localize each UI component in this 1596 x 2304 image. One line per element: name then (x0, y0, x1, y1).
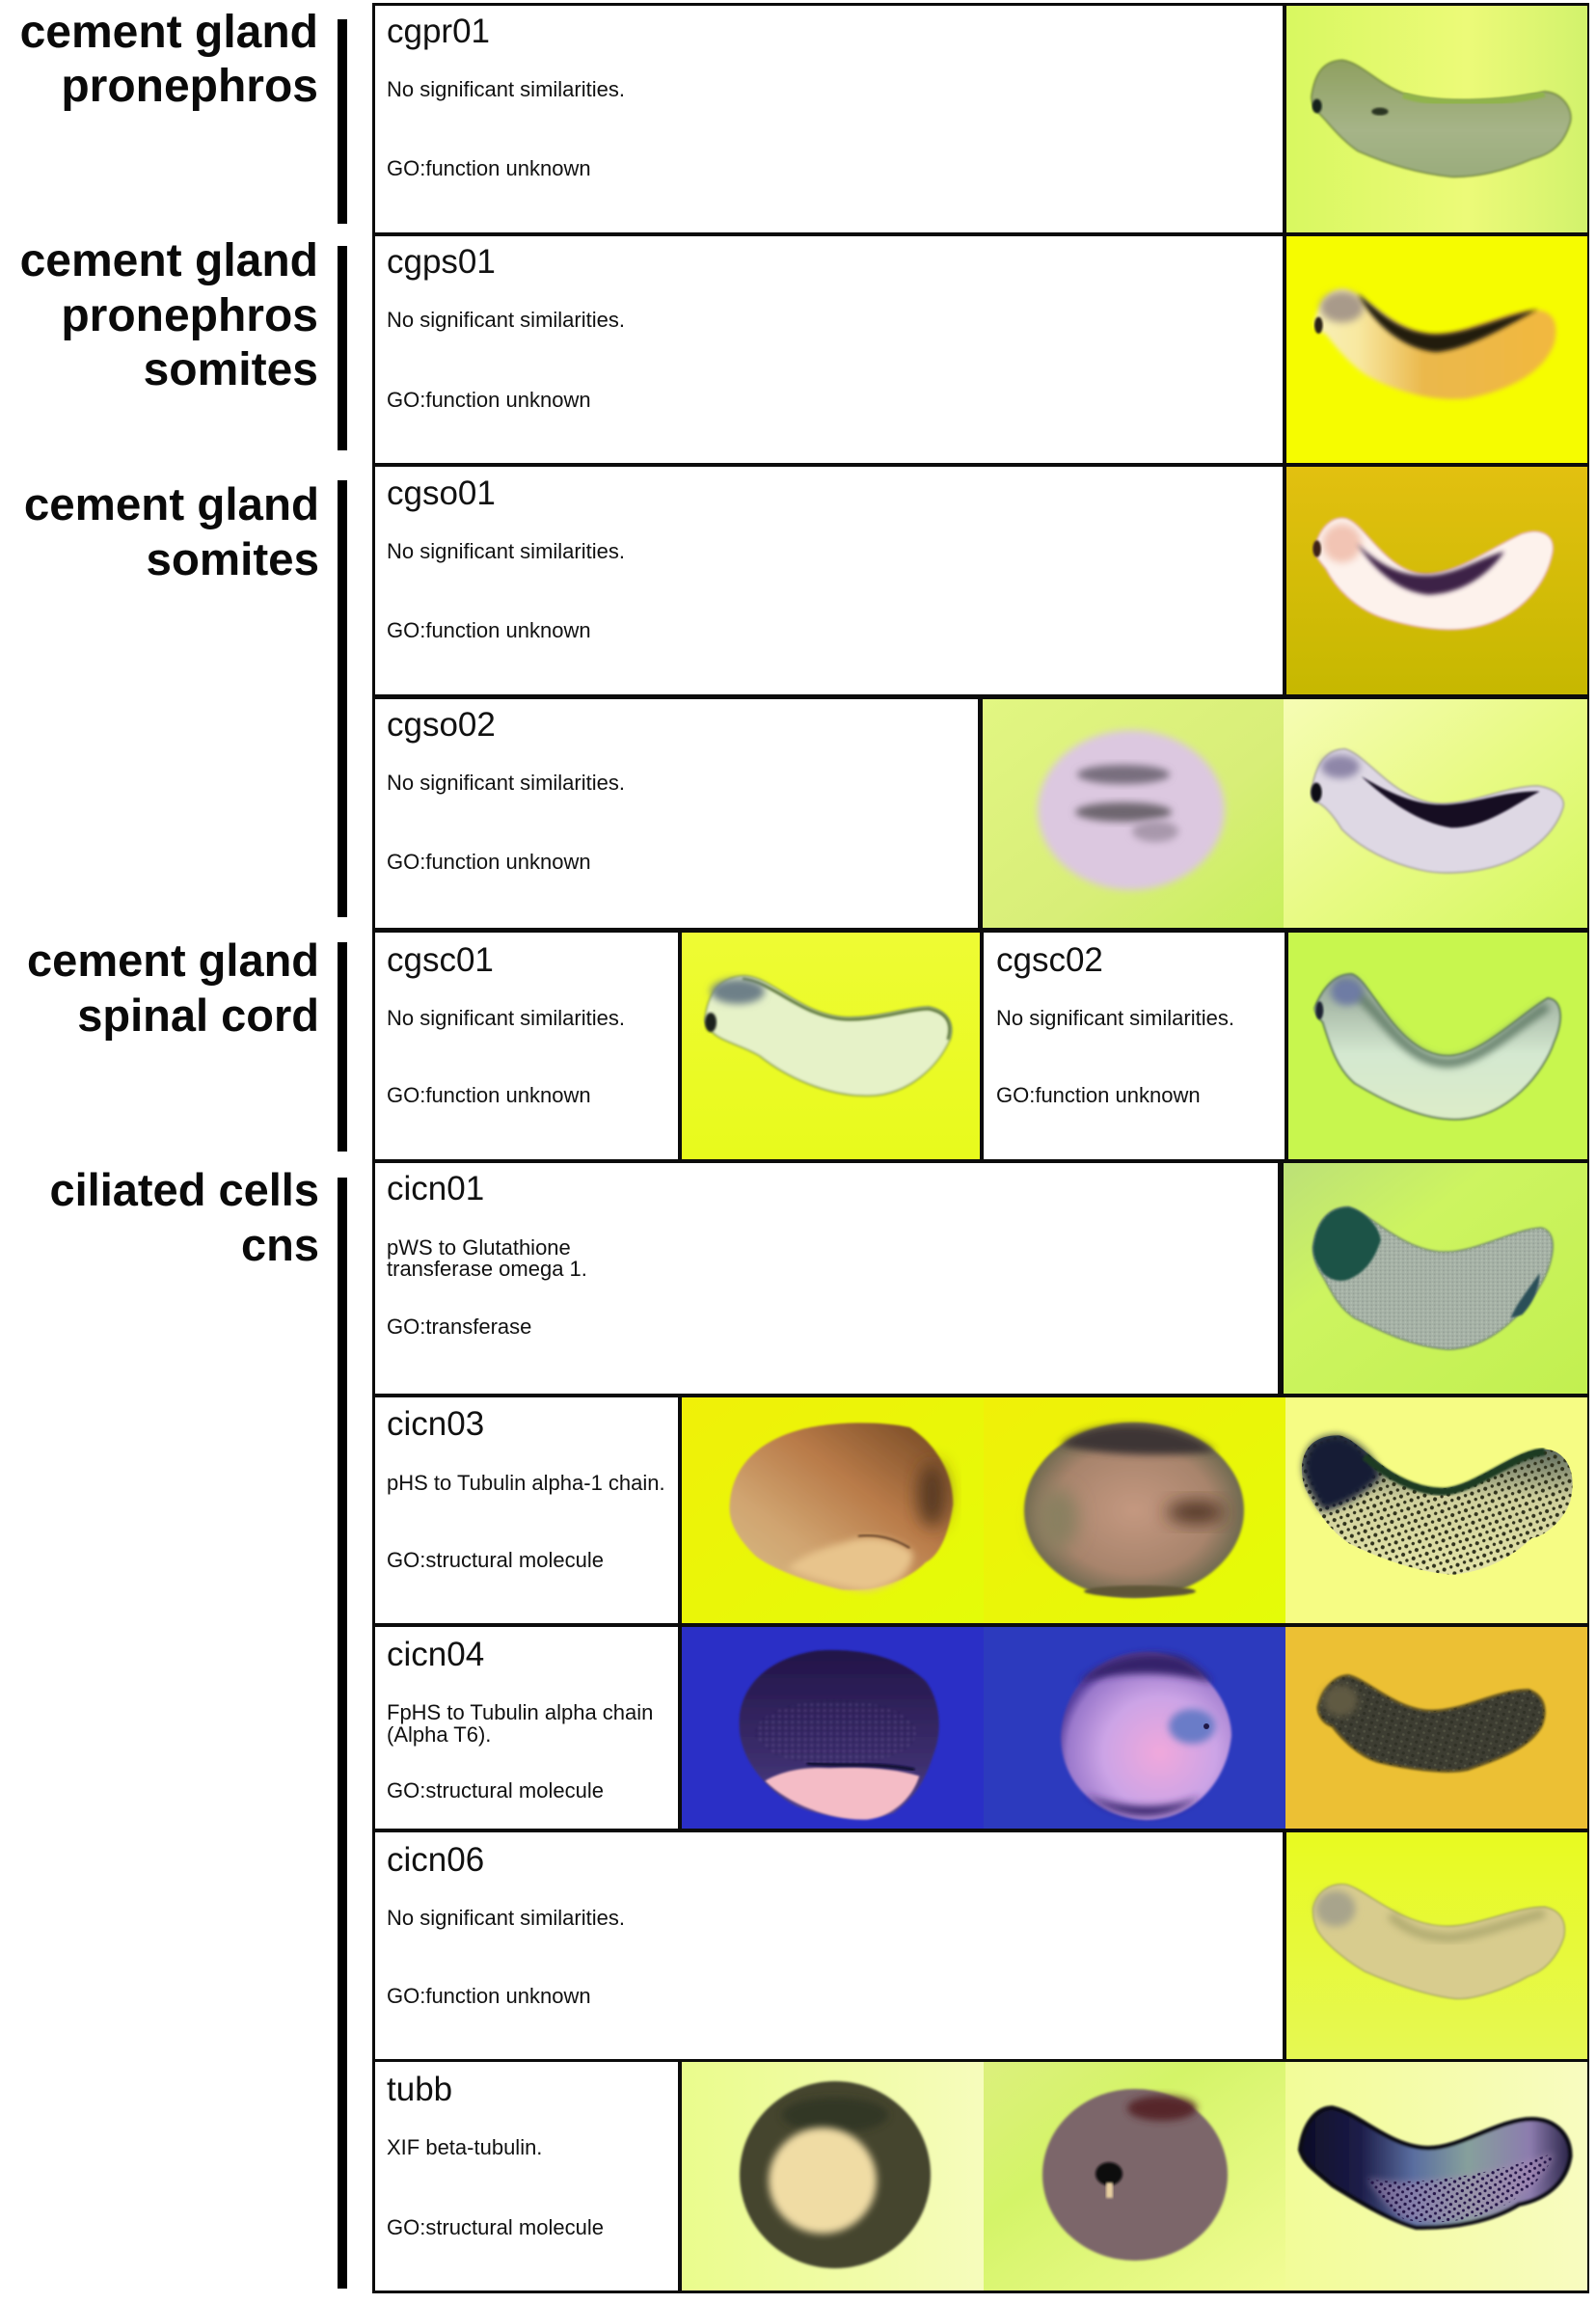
group heading: cement gland somites: somites (146, 534, 319, 585)
gene text: cicn04: (Alpha T6). (387, 1722, 491, 1747)
embryo: cicn03 tailbud (1302, 1435, 1573, 1575)
gene text: cgpr01: No significant similarities. (387, 77, 625, 101)
gene text: tubb: tubb (387, 2071, 452, 2108)
row: cgsc (387, 931, 1588, 1161)
row: cgso02 (387, 698, 1587, 930)
gene text: cgps01: GO:function unknown (387, 388, 591, 412)
gene text: cgps01: No significant similarities. (387, 308, 625, 332)
group heading: cement gland somites: cement gland (24, 479, 319, 530)
gene text: cgsc01: cgsc01 (387, 941, 494, 979)
row: cicn01 (387, 1163, 1587, 1395)
gene text: cicn01: cicn01 (387, 1170, 484, 1207)
embryo: cgsc01 tailbud (705, 976, 952, 1096)
row: cgps01 (387, 235, 1588, 465)
gene text: cgso02: No significant similarities. (387, 771, 625, 795)
tile background: cgsc01 (679, 931, 980, 1161)
group heading: cement gland pronephros somites (20, 235, 318, 395)
group heading: cement gland pronephros somites: pronephros (61, 290, 318, 341)
embryo: cicn04 first stage (740, 1650, 939, 1820)
tile background: cicn03 first stage (679, 1396, 984, 1626)
tile background: cicn04 first stage (679, 1627, 984, 1830)
gene text: cicn06: cicn06 (387, 1841, 484, 1879)
embryo: tubb blastula (740, 2081, 931, 2268)
row: cgso01 (387, 467, 1588, 696)
group heading: cement gland pronephros: cement gland (20, 7, 318, 58)
embryo: cgsc02 tailbud (1314, 974, 1560, 1120)
group heading: cement gland somites (24, 479, 319, 585)
embryo: cgso02 tailbud (1311, 749, 1563, 873)
tile background: cgso02 early stage (980, 698, 1284, 930)
gene text: tubb: XIF beta-tubulin. (387, 2135, 542, 2159)
group bar: cement gland spinal cord (338, 942, 347, 1152)
group heading: cement gland pronephros somites: cement gland (20, 235, 318, 286)
gene text: cicn01: GO:transferase (387, 1315, 531, 1339)
gene text: cgso01: GO:function unknown (387, 618, 591, 642)
tile background: tubb tailbud (1285, 2062, 1588, 2290)
gene text: cgsc02: cgsc02 (996, 941, 1103, 979)
gene text: tubb (387, 2071, 604, 2239)
embryo: cgso02 neurula (1038, 730, 1225, 890)
gene text: cicn01: transferase omega 1. (387, 1257, 587, 1281)
table grid lines (372, 3, 1589, 2293)
gene text: cgso01 (387, 474, 625, 642)
tile background: cicn06 (1285, 1832, 1588, 2061)
tile background: tubb second stage (984, 2062, 1285, 2290)
gene text: cicn03 (387, 1405, 665, 1572)
embryo: cicn06 tailbud (1313, 1884, 1564, 1998)
group heading: cement gland pronephros (20, 7, 318, 112)
group heading: cement gland spinal cord: spinal cord (77, 989, 319, 1041)
gene text: cicn06 (387, 1841, 625, 2008)
gene text: cicn04: cicn04 (387, 1636, 484, 1673)
group bar: ciliated cells cns (338, 1178, 347, 2289)
tile background: cicn03 second stage (984, 1396, 1285, 1626)
tile background: cgpr01 (1285, 5, 1588, 234)
row: tubb (387, 2062, 1588, 2290)
gene text: cgsc02: No significant similarities. (996, 1006, 1234, 1030)
group heading: cement gland pronephros: pronephros (61, 61, 318, 112)
gene text: cgso02: cgso02 (387, 706, 496, 744)
gene text: cgpr01: GO:function unknown (387, 156, 591, 180)
gene text: cicn06: GO:function unknown (387, 1984, 591, 2008)
gene text: cicn04: GO:structural molecule (387, 1778, 604, 1803)
row: cicn04 (387, 1627, 1588, 1830)
embryo: cicn04 second stage (1061, 1652, 1231, 1820)
group bar: cement gland pronephros somites (338, 246, 347, 450)
embryo: cicn01 tailbud (1313, 1207, 1553, 1349)
embryo: tubb tailbud (1300, 2108, 1570, 2228)
group heading: ciliated cells cns: cns (241, 1219, 319, 1270)
gene text: cgsc02: GO:function unknown (996, 1083, 1201, 1107)
tile background: cgso01 (1285, 467, 1588, 696)
tile background: cicn04 tailbud (1285, 1627, 1588, 1830)
embryo: tubb gastrula (1042, 2089, 1228, 2261)
tile background: cgso02 tailbud (1284, 698, 1587, 930)
gene text: cicn03: cicn03 (387, 1405, 484, 1443)
tile background: cicn01 (1281, 1163, 1587, 1395)
group heading: cement gland pronephros somites: somites (144, 344, 318, 395)
tile background: cgsc02 (1286, 931, 1588, 1161)
group heading: cement gland spinal cord: cement gland (27, 935, 319, 986)
embryo: cicn03 first stage (729, 1423, 953, 1590)
group heading: cement gland spinal cord (27, 935, 319, 1041)
tile background: tubb first stage (679, 2062, 984, 2290)
embryo: cgso01 tailbud (1312, 518, 1553, 630)
gene text: cicn01: pWS to Glutathione (387, 1235, 571, 1260)
row: cgpr01 (387, 5, 1588, 234)
gene text: cgso01: No significant similarities. (387, 539, 625, 563)
embryo: cgpr01 tailbud (1312, 60, 1571, 176)
gene text: cicn04 (387, 1636, 653, 1803)
gene text: cgps01: cgps01 (387, 243, 496, 281)
gene text: cgso01: cgso01 (387, 474, 496, 512)
group heading: ciliated cells cns (49, 1164, 319, 1270)
gene text: cicn01 (387, 1170, 587, 1339)
embryo: cgps01 tailbud (1314, 289, 1555, 399)
embryo: cicn04 tailbud (1318, 1675, 1545, 1772)
gene text: cgsc01: GO:function unknown (387, 1083, 591, 1107)
group bar: cement gland pronephros (338, 19, 347, 224)
row: cicn06 (387, 1832, 1588, 2061)
group heading: ciliated cells cns: ciliated cells (49, 1164, 319, 1215)
gene text: cgso02 (387, 706, 625, 874)
gene text: cgso02: GO:function unknown (387, 850, 591, 874)
gene text: cicn03: pHS to Tubulin alpha-1 chain. (387, 1471, 665, 1495)
gene text: cgsc02 (996, 941, 1234, 1107)
gene text: cicn03: GO:structural molecule (387, 1548, 604, 1572)
gene text: cgsc01: No significant similarities. (387, 1006, 625, 1030)
gene text: cicn06: No significant similarities. (387, 1906, 625, 1930)
gene text: tubb: GO:structural molecule (387, 2215, 604, 2239)
group bar: cement gland somites (338, 480, 347, 917)
tile background: cicn03 tailbud (1285, 1396, 1588, 1626)
embryo: cicn03 second stage (1024, 1423, 1244, 1598)
gene text: cgpr01 (387, 13, 625, 180)
row: cicn03 (387, 1396, 1588, 1626)
gene text: cgpr01: cgpr01 (387, 13, 490, 50)
gene text: cicn04: FpHS to Tubulin alpha chain (387, 1700, 653, 1724)
tile background: cicn04 second stage (984, 1627, 1285, 1830)
tile background: cgps01 (1285, 235, 1588, 465)
gene text: cgsc01 (387, 941, 625, 1107)
table background (373, 4, 1588, 2291)
gene text: cgps01 (387, 243, 625, 412)
